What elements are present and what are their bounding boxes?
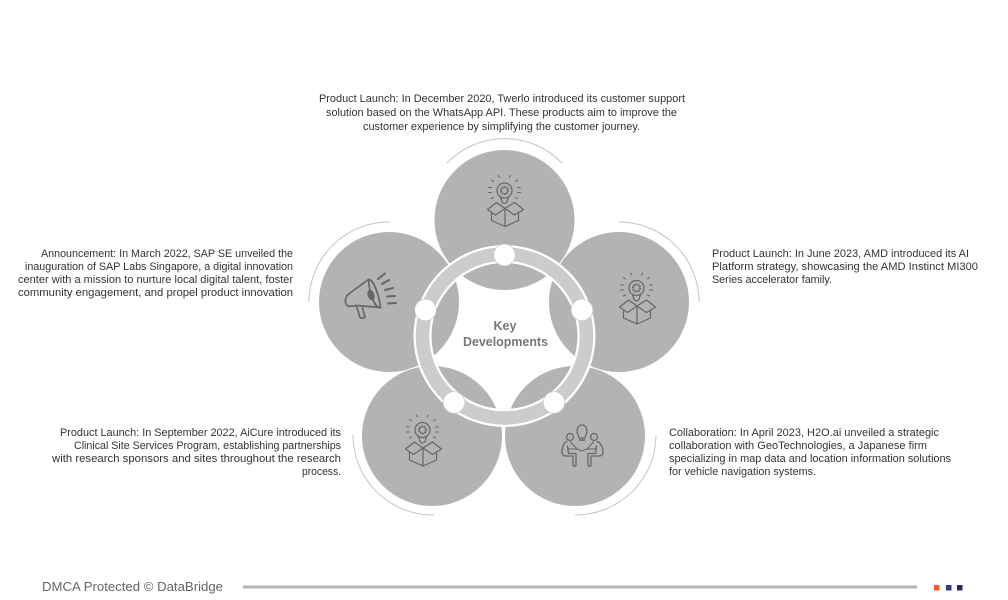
- text block: top product launch: solution based on the WhatsApp API. These products aim to improve the: [326, 107, 677, 119]
- text block: right product launch: Product Launch: In June 2023, AMD introduced its AI: [712, 248, 969, 260]
- text block: left announcement: center with a mission to nurture local digital talent, foster: [18, 274, 293, 286]
- central ring: [422, 254, 586, 418]
- footer rule: [243, 586, 917, 588]
- text block: bottom right collaboration: specializing in map data and location information solutions: [669, 453, 951, 465]
- text block: top product launch: Product Launch: In December 2020, Twerlo introduced its customer support: [319, 93, 685, 105]
- text block: right product launch: Series accelerator family.: [712, 274, 832, 286]
- icon: bulb in box, bottom left: [406, 415, 442, 466]
- center title: [463, 319, 548, 349]
- text block: bottom left product launch: Clinical Site Services Program, establishing partnerships: [74, 440, 341, 452]
- icon: bulb in box, top: [488, 176, 524, 226]
- footer colour squares: [934, 585, 962, 590]
- text block: top product launch: [319, 93, 685, 133]
- center title: Developments: [463, 335, 548, 349]
- text block: right product launch: [712, 248, 978, 286]
- icon: bulb in box, right: [620, 273, 656, 324]
- text block: bottom right collaboration: [669, 427, 951, 478]
- text block: bottom left product launch: process.: [302, 466, 341, 478]
- text block: right product launch: Platform strategy, showcasing the AMD Instinct MI300: [712, 261, 978, 273]
- text block: bottom left product launch: [51, 427, 341, 478]
- text block: left announcement: community engagement, and propel product innovation: [18, 287, 293, 299]
- text block: bottom left product launch: Product Launch: In September 2022, AiCure introduced its: [60, 427, 341, 439]
- icon: megaphone: [345, 274, 396, 318]
- center title: Key: [494, 319, 517, 333]
- five grey circles: [318, 150, 690, 506]
- footer label: DMCA Protected © DataBridge: [42, 580, 223, 594]
- text block: left announcement: [18, 248, 293, 299]
- text block: left announcement: Announcement: In March 2022, SAP SE unveiled the: [41, 248, 293, 260]
- outer arcs: [309, 139, 699, 515]
- text block: left announcement: inauguration of SAP Labs Singapore, a digital innovation: [25, 261, 293, 273]
- text block: bottom right collaboration: for vehicle navigation systems.: [669, 466, 816, 478]
- text block: bottom right collaboration: Collaboration: In April 2023, H2O.ai unveiled a strategic: [669, 427, 940, 439]
- ring nodes: [415, 244, 593, 413]
- icon: people meeting with bulb: [562, 425, 603, 466]
- text block: top product launch: customer experience by simplifying the customer journey.: [363, 121, 640, 133]
- text block: bottom left product launch: with research sponsors and sites throughout the research: [51, 453, 341, 465]
- text block: bottom right collaboration: collaboration with GeoTechnologies, a Japanese firm: [669, 440, 927, 452]
